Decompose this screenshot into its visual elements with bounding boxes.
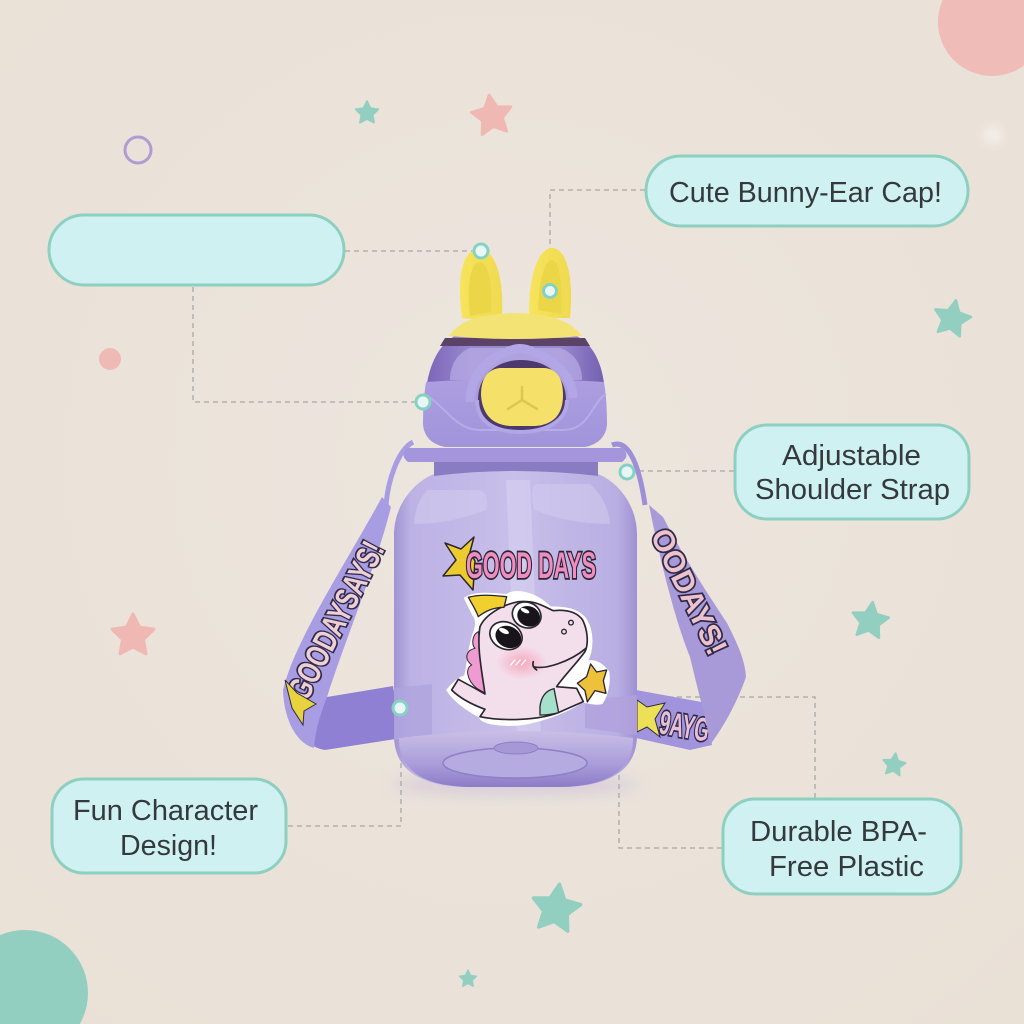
star: teal lower right	[881, 752, 907, 776]
strap: right	[612, 444, 746, 750]
cap	[404, 248, 626, 462]
ear: right	[529, 248, 571, 318]
straw	[506, 480, 541, 735]
star: pink top	[469, 92, 514, 136]
callout: bunny-ear cap	[646, 156, 968, 226]
dino eye back	[508, 597, 545, 633]
callout: empty	[49, 215, 344, 285]
strap loop, right	[612, 444, 645, 505]
star: teal right	[931, 297, 974, 338]
star: teal top	[356, 101, 378, 123]
dino hat	[468, 595, 507, 617]
strap lower band, right	[636, 690, 712, 750]
yellow button	[481, 368, 563, 426]
callout: BPA-free	[723, 799, 961, 894]
dino eye front	[485, 617, 527, 655]
strap seen through the bottle, left	[394, 684, 432, 740]
strap loop, left	[386, 442, 413, 505]
body highlight right	[532, 484, 610, 524]
strap lettering, left: GOODAYSAYS!	[280, 535, 391, 705]
callout: character design: Design!	[120, 830, 217, 862]
button frame upper	[470, 348, 573, 402]
dome highlight	[450, 348, 582, 380]
strap seen through the bottle, right	[585, 695, 637, 735]
dino spine	[467, 632, 488, 695]
star: teal mid right	[850, 600, 891, 639]
decorative circle: bottom left teal	[0, 930, 88, 1024]
callout: shoulder strap	[735, 425, 969, 519]
connector lines	[193, 190, 815, 848]
dino star	[577, 664, 607, 702]
dino blush marks	[511, 660, 526, 665]
decorative ring: purple	[125, 137, 151, 163]
callout: character design: Fun Character	[73, 795, 258, 827]
dino blush	[497, 646, 547, 679]
callout: BPA-free: Free Plastic	[769, 851, 924, 883]
dino shirt	[540, 689, 559, 715]
dinosaur sticker	[447, 592, 609, 725]
decorative dot: pink	[99, 348, 121, 370]
callout: bunny-ear cap: Cute Bunny-Ear Cap!	[669, 177, 942, 209]
strap star, left	[285, 680, 316, 725]
dino smile	[533, 648, 586, 670]
callout dots	[393, 244, 634, 715]
button frame lower	[477, 400, 567, 432]
callout: BPA-free: Durable BPA-	[750, 816, 927, 848]
callout: shoulder strap: Shoulder Strap	[755, 474, 950, 506]
collar contour line	[424, 394, 606, 430]
bottle base	[399, 731, 633, 787]
star: teal bottom large	[530, 881, 583, 932]
body highlights	[414, 490, 487, 524]
callout: shoulder strap: Adjustable	[782, 440, 921, 472]
logo text: GOOD DAYS	[466, 545, 596, 586]
base hub detail	[494, 742, 538, 754]
strap lower lettering, right: 9AYG	[657, 703, 712, 749]
ear inner: left	[469, 262, 492, 316]
star: teal bottom small	[459, 970, 477, 986]
logo star	[443, 537, 475, 590]
strap lower star, right	[637, 700, 665, 737]
button emboss	[508, 387, 537, 409]
sticker backing	[447, 592, 609, 725]
translucent dome	[427, 333, 604, 383]
bottle graphic: good days logo	[443, 537, 596, 590]
strap: left	[280, 442, 413, 750]
decorative glow	[983, 125, 1003, 145]
dome tint rim	[440, 338, 590, 346]
strap lower band, left	[305, 686, 402, 750]
bottle	[394, 462, 637, 787]
strap front, left	[283, 497, 391, 748]
strap front, right	[649, 505, 746, 745]
callout: character design	[52, 779, 286, 873]
bottle neck shading	[434, 462, 598, 476]
dino nostrils	[562, 620, 573, 634]
base ellipse detail	[443, 748, 587, 778]
floor shadow	[390, 775, 640, 795]
star: pink left	[112, 614, 154, 654]
button recess	[478, 360, 566, 431]
yellow cap top	[449, 313, 582, 339]
bottle body	[394, 462, 637, 787]
ear inner: right	[538, 260, 562, 314]
decorative circle: top right pink	[938, 0, 1024, 76]
strap lettering, right: OODAYS!	[644, 524, 733, 660]
purple collar	[423, 379, 607, 447]
ear: left	[460, 249, 502, 320]
dino body	[452, 601, 587, 720]
neck flange	[404, 448, 626, 462]
